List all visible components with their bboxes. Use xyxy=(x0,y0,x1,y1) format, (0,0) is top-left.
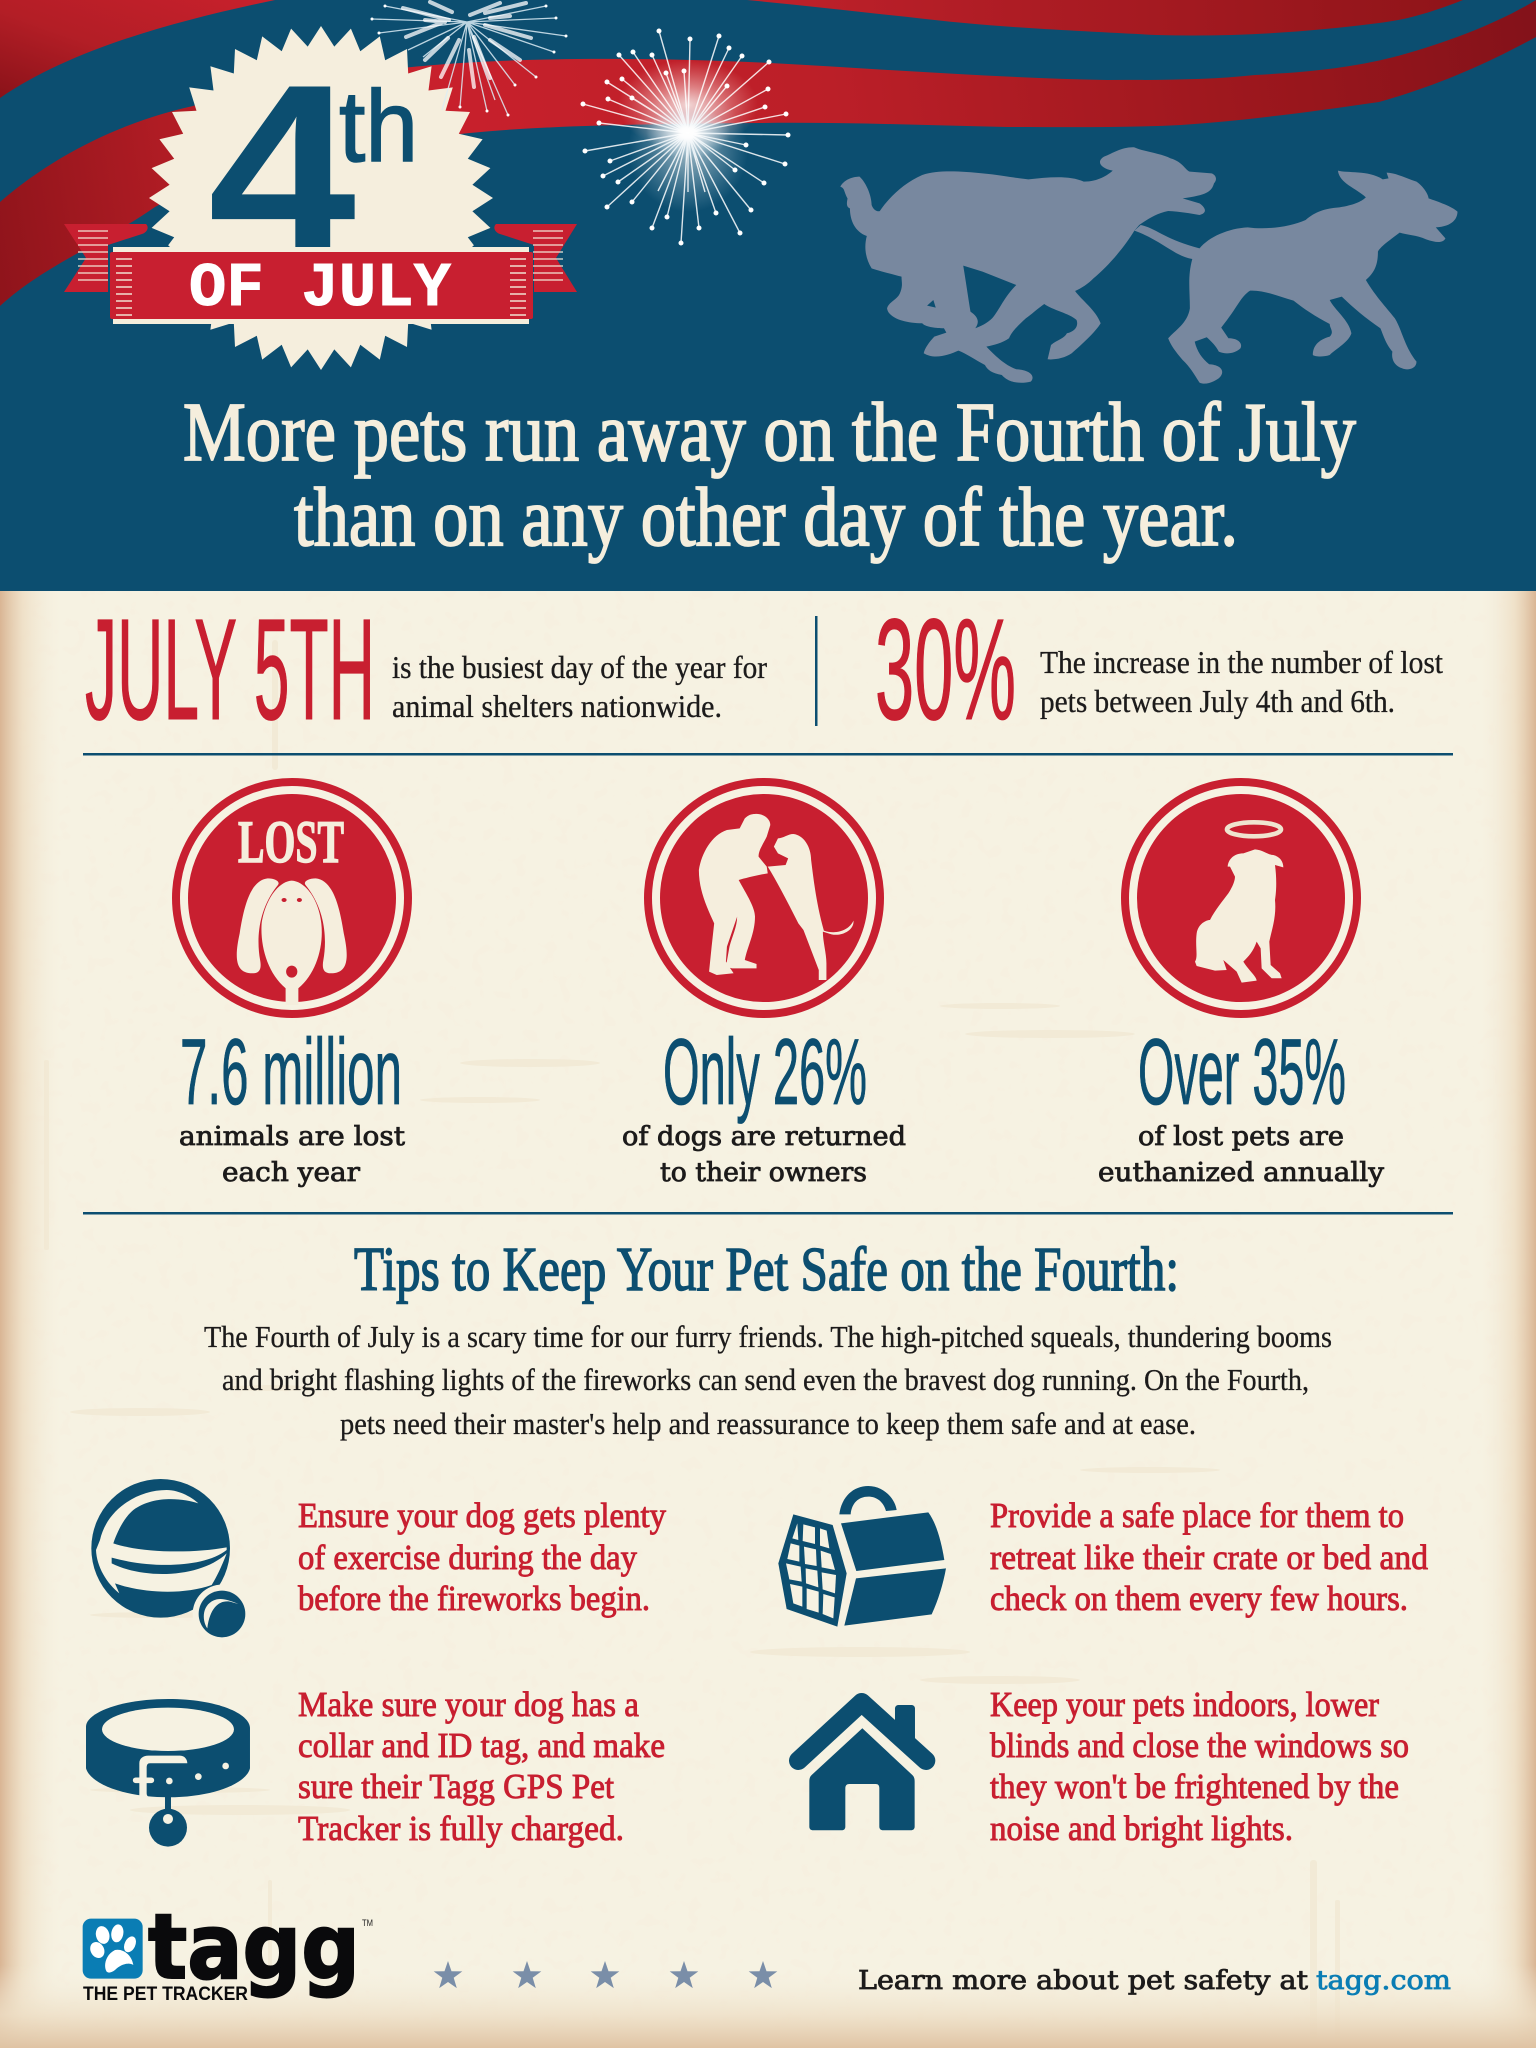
icon: paw xyxy=(83,1919,143,1979)
description xyxy=(1040,644,1443,719)
caption xyxy=(1098,1122,1384,1188)
icon: house xyxy=(798,1702,926,1830)
tip: exercise: of exercise during the day xyxy=(298,1538,637,1577)
numeral 4: 4 xyxy=(208,34,356,304)
starburst seal xyxy=(149,26,493,370)
stat: 30 percent: 30% xyxy=(875,589,1016,750)
ribbon tails xyxy=(64,224,577,292)
trademark: TM xyxy=(362,1918,373,1928)
tips intro paragraph xyxy=(204,1319,1332,1441)
stat: July 5th: JULY 5TH xyxy=(85,589,375,750)
panel: dogs returned xyxy=(622,782,906,1188)
banner xyxy=(110,252,533,319)
tip: safe place: check on them every few hours. xyxy=(990,1579,1408,1618)
headline xyxy=(183,386,1356,564)
blue ribbon folds xyxy=(108,227,533,247)
caption: each year xyxy=(222,1158,361,1188)
panel: pets euthanized xyxy=(1098,782,1384,1188)
icon: lost dog: LOST xyxy=(238,809,344,875)
tip: exercise: before the fireworks begin. xyxy=(298,1579,650,1618)
description: animal shelters nationwide. xyxy=(392,688,722,724)
tips intro paragraph: and bright flashing lights of the fireworks can send even the bravest dog running. On the Fourth, xyxy=(222,1362,1309,1397)
OF JULY: OF JULY xyxy=(189,253,452,324)
tip: collar and ID: sure their Tagg GPS Pet xyxy=(298,1767,614,1806)
icon: man and dog xyxy=(648,782,880,1014)
tip: indoors xyxy=(990,1685,1409,1848)
tip: indoors: they won't be frightened by the xyxy=(990,1767,1399,1806)
icon: lost dog xyxy=(176,782,408,1014)
footer call to action: tagg.com xyxy=(1316,1966,1451,1996)
tip: safe place: retreat like their crate or bed and xyxy=(990,1538,1428,1577)
tip: collar and ID: collar and ID tag, and make xyxy=(298,1726,665,1765)
tagline: THE PET TRACKER xyxy=(83,1984,248,2005)
firework: center xyxy=(583,31,788,243)
tip: indoors: noise and bright lights. xyxy=(990,1809,1293,1848)
caption: of dogs are returned xyxy=(622,1122,906,1152)
ribbon: top left xyxy=(0,0,275,98)
stars xyxy=(434,1961,777,1988)
headline: than on any other day of the year. xyxy=(294,471,1238,564)
description xyxy=(392,649,767,724)
tips intro paragraph: pets need their master's help and reassurance to keep them safe and at ease. xyxy=(340,1406,1196,1441)
tip: collar and ID: Make sure your dog has a xyxy=(298,1685,639,1724)
tip: safe place xyxy=(990,1496,1428,1618)
stat: 30 percent xyxy=(875,589,1443,750)
description: is the busiest day of the year for xyxy=(392,649,767,685)
tip: indoors: blinds and close the windows so xyxy=(990,1726,1409,1765)
caption: to their owners xyxy=(660,1158,867,1188)
caption xyxy=(622,1122,906,1188)
figure: 7.6 million: 7.6 million xyxy=(180,1019,402,1124)
icon: carrier xyxy=(778,1486,946,1627)
caption xyxy=(179,1122,406,1188)
caption: of lost pets are xyxy=(1138,1122,1344,1152)
description: The increase in the number of lost xyxy=(1040,644,1443,680)
running dogs xyxy=(840,147,1457,384)
paper background xyxy=(0,591,1536,2048)
tip: exercise xyxy=(298,1496,666,1618)
icon: dog with halo xyxy=(1125,782,1357,1014)
tip: exercise: Ensure your dog gets plenty xyxy=(298,1496,666,1535)
firework: top xyxy=(372,2,566,115)
icon: ball xyxy=(91,1479,251,1643)
tips heading: Tips to Keep Your Pet Safe on the Fourth: xyxy=(354,1236,1179,1304)
tip: collar and ID xyxy=(298,1685,665,1848)
tip: safe place: Provide a safe place for them to xyxy=(990,1496,1404,1535)
ribbon: top right xyxy=(747,0,1463,36)
dog: left xyxy=(840,147,1216,383)
panel: lost animals xyxy=(176,782,408,1188)
tips intro paragraph: The Fourth of July is a scary time for our furry friends. The high-pitched squeals, thundering booms xyxy=(204,1319,1332,1354)
dog: right xyxy=(1134,171,1457,384)
header band xyxy=(0,0,1536,591)
tip: collar and ID: Tracker is fully charged. xyxy=(298,1809,624,1848)
caption: euthanized annually xyxy=(1098,1158,1384,1188)
icon: collar xyxy=(86,1699,250,1847)
tip: indoors: Keep your pets indoors, lower xyxy=(990,1685,1379,1724)
logo: tagg xyxy=(83,1895,373,2005)
description: pets between July 4th and 6th. xyxy=(1040,683,1395,719)
footer call to action xyxy=(858,1966,1451,1996)
ribbon: main sweep xyxy=(0,0,1536,306)
footer call to action: Learn more about pet safety at xyxy=(858,1966,1309,1996)
badge: 4th of July xyxy=(64,26,577,370)
wordmark: tagg xyxy=(148,1895,360,2000)
caption: animals are lost xyxy=(179,1122,406,1152)
th: th xyxy=(339,71,418,183)
figure: only 26%: Only 26% xyxy=(663,1019,867,1124)
